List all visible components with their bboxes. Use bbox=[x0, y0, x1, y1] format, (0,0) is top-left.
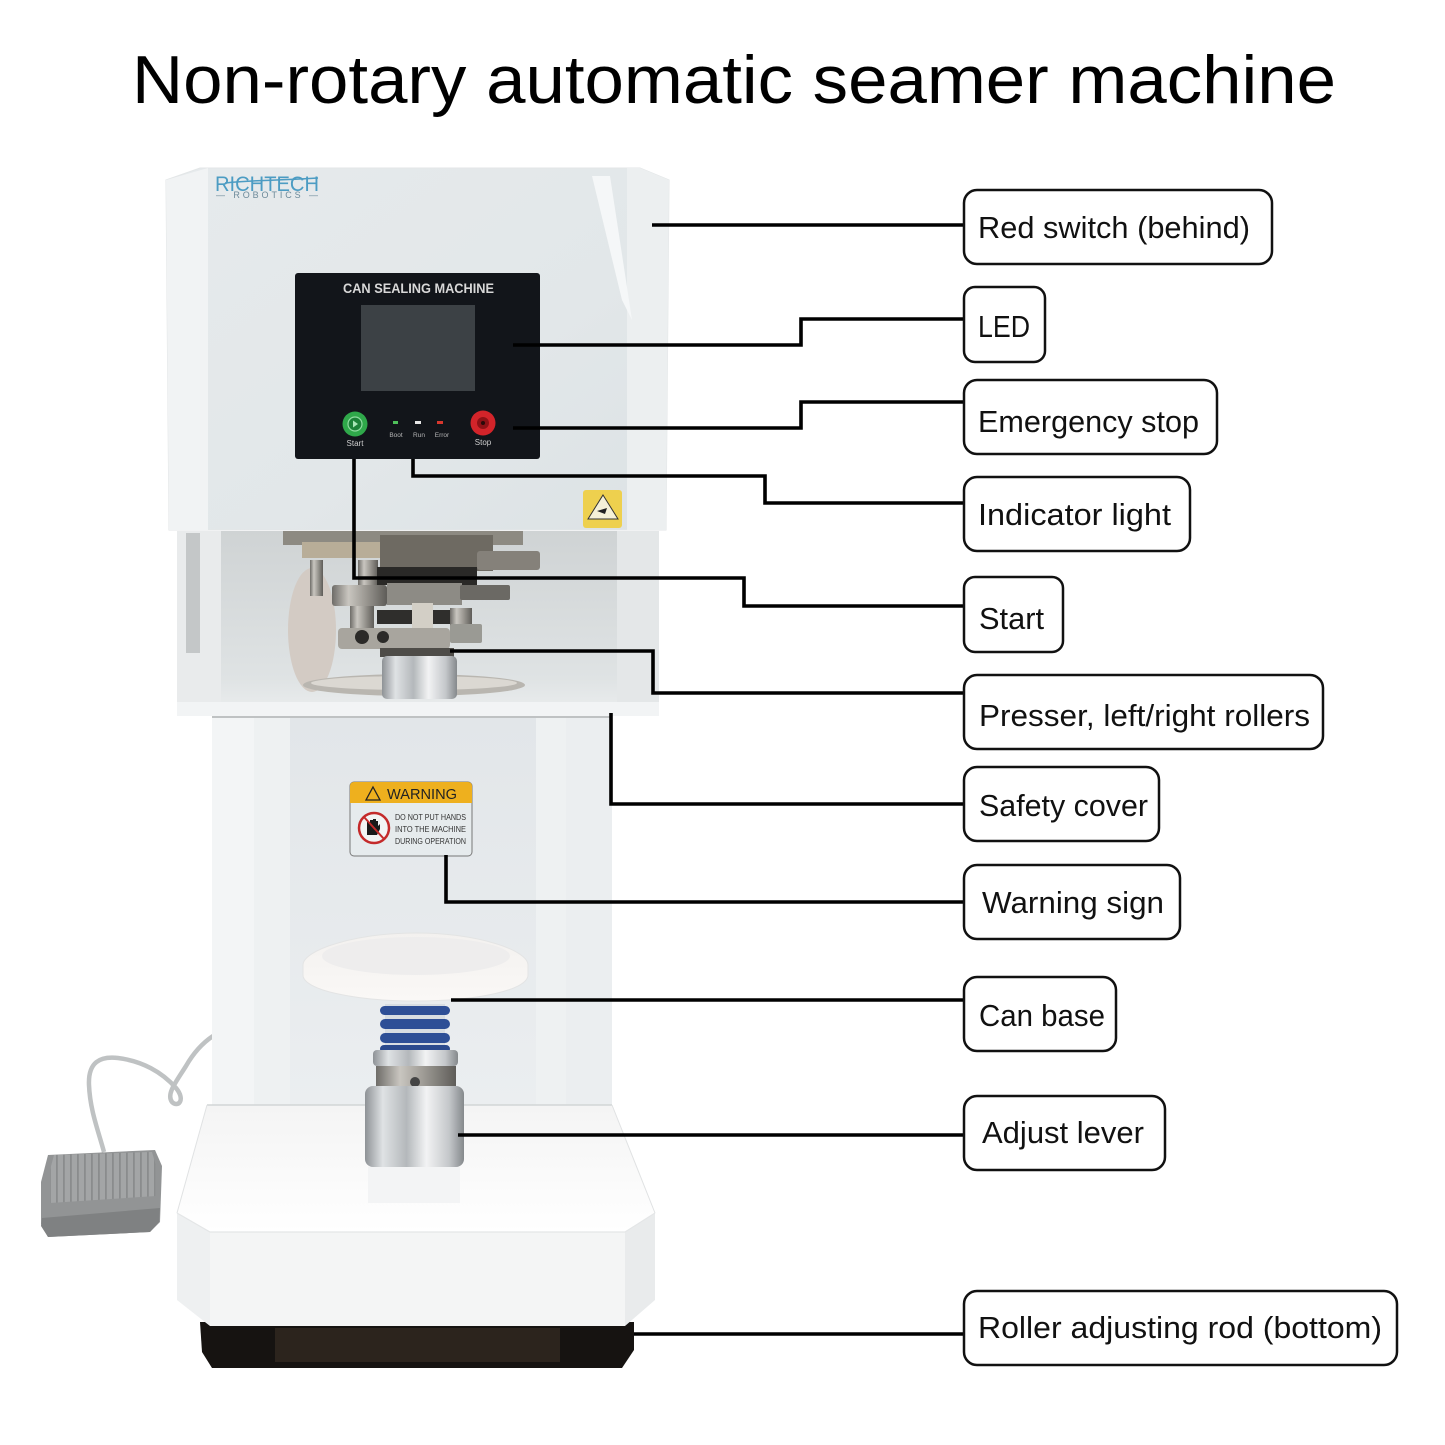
leader: indicator light bbox=[413, 459, 964, 503]
callout: warning sign: Warning sign bbox=[982, 885, 1164, 920]
foot pedal bbox=[41, 1150, 162, 1237]
callout: presser and rollers bbox=[964, 675, 1323, 749]
leader: LED bbox=[513, 319, 964, 345]
column bbox=[212, 716, 612, 1108]
hand hazard sticker bbox=[583, 490, 622, 528]
adjust lever cylinder bbox=[365, 1086, 464, 1167]
warning sign: DO NOT PUT HANDS bbox=[395, 813, 466, 822]
foot pedal cable bbox=[89, 1036, 213, 1152]
callout: roller adjusting rod: Roller adjusting rod (bottom) bbox=[978, 1310, 1382, 1345]
indicator lights: Run bbox=[413, 432, 425, 439]
indicator lights: Boot bbox=[389, 432, 403, 439]
stop button bbox=[470, 410, 496, 447]
callout: indicator light: Indicator light bbox=[978, 497, 1171, 532]
callout: start bbox=[964, 577, 1063, 652]
indicator lights: Error bbox=[435, 432, 450, 439]
LED screen bbox=[361, 305, 475, 391]
warning sign: INTO THE MACHINE bbox=[395, 825, 466, 834]
callout: emergency stop bbox=[964, 380, 1217, 454]
base black feet bbox=[200, 1322, 634, 1368]
leader: roller adjusting rod bbox=[634, 1332, 964, 1336]
leader: emergency stop bbox=[513, 402, 964, 428]
safety cover bbox=[177, 531, 659, 717]
warning sign bbox=[350, 782, 472, 856]
start button: Start bbox=[347, 439, 364, 448]
brand logo: RICHTECH bbox=[215, 173, 319, 196]
callout: emergency stop: Emergency stop bbox=[978, 404, 1199, 439]
stop button: Stop bbox=[475, 438, 492, 447]
callout: warning sign bbox=[964, 865, 1180, 939]
warning sign: DURING OPERATION bbox=[395, 837, 466, 846]
callout: indicator light bbox=[964, 477, 1190, 551]
leader: safety cover bbox=[611, 713, 964, 804]
callout: adjust lever: Adjust lever bbox=[982, 1115, 1144, 1150]
callout: red switch: Red switch (behind) bbox=[978, 210, 1250, 245]
machine base bbox=[177, 1105, 655, 1326]
leader: warning sign bbox=[446, 855, 964, 902]
callout: safety cover: Safety cover bbox=[979, 788, 1148, 823]
callout: presser and rollers: Presser, left/right rollers bbox=[979, 698, 1310, 733]
callout: safety cover bbox=[964, 767, 1159, 841]
callout: LED bbox=[964, 287, 1045, 362]
leader: start bbox=[354, 459, 964, 606]
start button bbox=[342, 412, 368, 448]
leader: can base bbox=[451, 998, 964, 1002]
panel heading: CAN SEALING MACHINE bbox=[343, 280, 494, 296]
callout: LED: LED bbox=[978, 309, 1030, 344]
callout: roller adjusting rod bbox=[964, 1291, 1397, 1365]
leader: presser and rollers bbox=[450, 651, 964, 693]
seaming mechanism bbox=[283, 531, 540, 699]
collar bbox=[373, 1050, 458, 1090]
callout: can base: Can base bbox=[979, 998, 1105, 1033]
warning sign: WARNING bbox=[387, 787, 457, 803]
indicator lights bbox=[389, 421, 450, 439]
leader: red switch bbox=[652, 223, 964, 227]
can base disc bbox=[303, 933, 528, 1001]
control panel bbox=[295, 273, 540, 459]
head cabinet bbox=[166, 168, 669, 530]
base reflection bbox=[368, 1167, 460, 1203]
callout: red switch bbox=[964, 190, 1272, 264]
leader: adjust lever bbox=[458, 1133, 964, 1137]
callout: can base bbox=[964, 977, 1116, 1051]
spring bbox=[380, 1004, 450, 1053]
brand logo: — ROBOTICS — bbox=[216, 190, 318, 200]
callout: start: Start bbox=[979, 601, 1044, 636]
callout: adjust lever bbox=[964, 1096, 1165, 1170]
title: Non-rotary automatic seamer machine bbox=[132, 42, 1336, 118]
machine photo illustration bbox=[41, 168, 669, 1368]
